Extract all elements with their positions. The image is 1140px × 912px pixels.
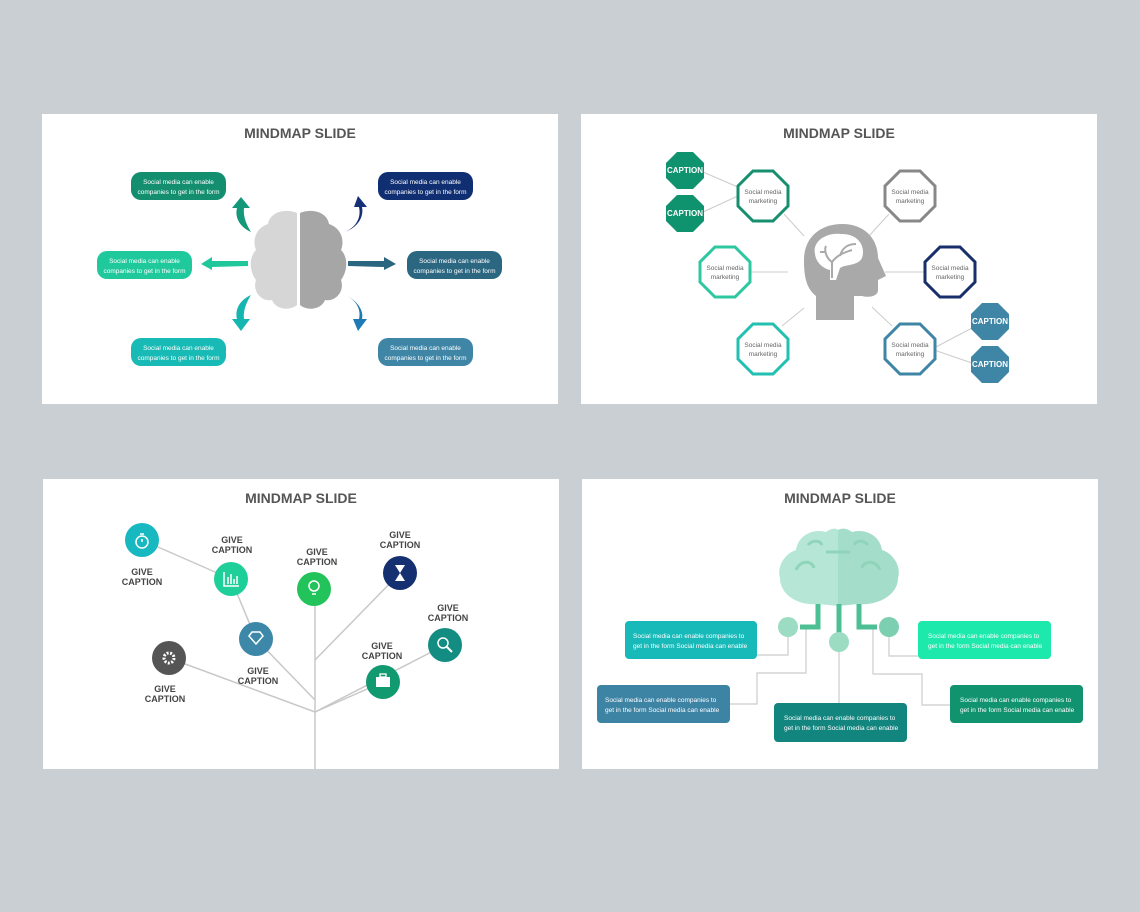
label: caption gear: CAPTION: [145, 694, 185, 704]
label: caption search: [428, 603, 468, 623]
badge: caption bottom 1: [971, 303, 1009, 340]
icon: briefcase: [366, 665, 400, 699]
callout: box top-left: Social media can enable companies to: [633, 633, 745, 640]
icon: mint brain circuit: [778, 529, 899, 652]
icon: hourglass: [383, 556, 417, 590]
arrow: right: [348, 257, 396, 270]
octagon: bottom-right: Social media: [891, 342, 929, 349]
icon: brain halves: [251, 211, 346, 309]
octagon: bottom-left: marketing: [749, 351, 778, 358]
octagon: mid-right navy: marketing: [936, 274, 965, 281]
icon: lightbulb: [297, 572, 331, 606]
label: caption hourglass: GIVE: [389, 530, 411, 540]
label: caption briefcase: GIVE: [371, 641, 393, 651]
callout: box bottom center: [774, 703, 907, 742]
octagon: bottom-right: [885, 324, 935, 374]
heading: panel 3 title: MINDMAP SLIDE: [245, 490, 357, 506]
octagon: bottom-right: marketing: [896, 351, 925, 358]
label: caption briefcase: CAPTION: [362, 651, 402, 661]
callout: top-right box: [378, 172, 473, 200]
callout: box mid-right: [950, 685, 1083, 723]
badge: caption bottom 2: [971, 346, 1009, 383]
label: caption diamond: GIVE: [247, 666, 269, 676]
callout: top-left box: [131, 172, 226, 200]
label: caption stopwatch: GIVE: [131, 567, 153, 577]
octagon: mid-left: [700, 247, 750, 297]
callout: mid-right box: [407, 251, 502, 279]
badge: caption top 2: [666, 195, 704, 232]
callout: box top-right: get in the form Social media can enable: [928, 643, 1043, 650]
callout: mid-left box: companies to get in the form: [103, 268, 186, 275]
callout: mid-left box: Social media can enable: [109, 258, 180, 265]
callout: bottom-right box: Social media can enable: [390, 345, 461, 352]
icon: stopwatch: [125, 523, 159, 557]
callout: mid-left box: [97, 251, 192, 279]
callout: box mid-left: [597, 685, 730, 723]
octagon: top-left green: marketing: [749, 198, 778, 205]
callout: mid-right box: Social media can enable: [419, 258, 490, 265]
callout: box mid-right: Social media can enable companies to: [960, 697, 1072, 704]
label: caption hourglass: CAPTION: [380, 540, 420, 550]
callout: bottom-left box: [131, 338, 226, 366]
arrow: up-left: [232, 197, 251, 232]
callout: bottom-right box: [378, 338, 473, 366]
callout: box top-right: [918, 621, 1051, 659]
heading: panel 4 title: MINDMAP SLIDE: [784, 490, 896, 506]
badge: caption bottom 1: CAPTION: [972, 317, 1008, 326]
callout: top-left box: companies to get in the form: [137, 189, 220, 196]
octagon: top-right gray: Social media: [891, 189, 929, 196]
panel: tree slide: [43, 479, 559, 769]
callout: bottom-left box: Social media can enable: [143, 345, 214, 352]
badge: caption bottom 2: CAPTION: [972, 360, 1008, 369]
callout: box top-right: Social media can enable companies to: [928, 633, 1040, 640]
label: caption stopwatch: CAPTION: [122, 577, 162, 587]
icon: search: [428, 628, 462, 662]
label: caption diamond: [238, 666, 278, 686]
label: caption hourglass: [380, 530, 420, 550]
label: caption chart: CAPTION: [212, 545, 252, 555]
callout: box bottom center: Social media can enable companies to: [784, 715, 896, 722]
callout: bottom-right box: companies to get in the form: [384, 355, 467, 362]
callout: box top-left: get in the form Social media can enable: [633, 643, 748, 650]
callout: top-left box: Social media can enable: [143, 179, 214, 186]
label: caption bulb: GIVE: [306, 547, 328, 557]
arrow: down-right: [345, 295, 367, 331]
octagon: bottom-left: [738, 324, 788, 374]
octagon: top-left green: Social media: [744, 189, 782, 196]
label: caption search: GIVE: [437, 603, 459, 613]
callout: box bottom center: get in the form Social media can enable: [784, 725, 899, 732]
octagon: mid-left: marketing: [711, 274, 740, 281]
callout: box mid-left: get in the form Social media can enable: [605, 707, 720, 714]
label: caption gear: GIVE: [154, 684, 176, 694]
heading: panel 1 title: MINDMAP SLIDE: [244, 125, 356, 141]
icon: bar chart: [214, 562, 248, 596]
callout: top-right box: companies to get in the form: [384, 189, 467, 196]
arrow: up-right: [345, 196, 367, 232]
label: caption diamond: CAPTION: [238, 676, 278, 686]
octagon: mid-right navy: Social media: [931, 265, 969, 272]
label: caption chart: GIVE: [221, 535, 243, 545]
label: caption chart: [212, 535, 252, 555]
icon: gear: [152, 641, 186, 675]
badge: caption top 1: [666, 152, 704, 189]
label: caption search: CAPTION: [428, 613, 468, 623]
callout: bottom-left box: companies to get in the form: [137, 355, 220, 362]
octagon: top-left green: [738, 171, 788, 221]
octagon: mid-left: Social media: [706, 265, 744, 272]
octagon: top-right gray: marketing: [896, 198, 925, 205]
panel: mint brain slide: [582, 479, 1098, 769]
arrow: left: [201, 257, 248, 270]
label: caption bulb: [297, 547, 337, 567]
octagon: top-right gray: [885, 171, 935, 221]
icon: diamond: [239, 622, 273, 656]
badge: caption top 1: CAPTION: [667, 166, 703, 175]
label: caption bulb: CAPTION: [297, 557, 337, 567]
panel: head octagon slide: [581, 114, 1097, 404]
octagon: bottom-left: Social media: [744, 342, 782, 349]
callout: box top-left: [625, 621, 757, 659]
icon: head with brain: [804, 224, 886, 320]
badge: caption top 2: CAPTION: [667, 209, 703, 218]
arrow: down-left: [232, 295, 251, 331]
panel: brain arrows slide: [42, 114, 558, 404]
heading: panel 2 title: MINDMAP SLIDE: [783, 125, 895, 141]
label: caption stopwatch: [122, 567, 162, 587]
callout: box mid-right: get in the form Social media can enable: [960, 707, 1075, 714]
label: caption briefcase: [362, 641, 402, 661]
callout: top-right box: Social media can enable: [390, 179, 461, 186]
callout: box mid-left: Social media can enable companies to: [605, 697, 717, 704]
label: caption gear: [145, 684, 185, 704]
octagon: mid-right navy: [925, 247, 975, 297]
callout: mid-right box: companies to get in the form: [413, 268, 496, 275]
